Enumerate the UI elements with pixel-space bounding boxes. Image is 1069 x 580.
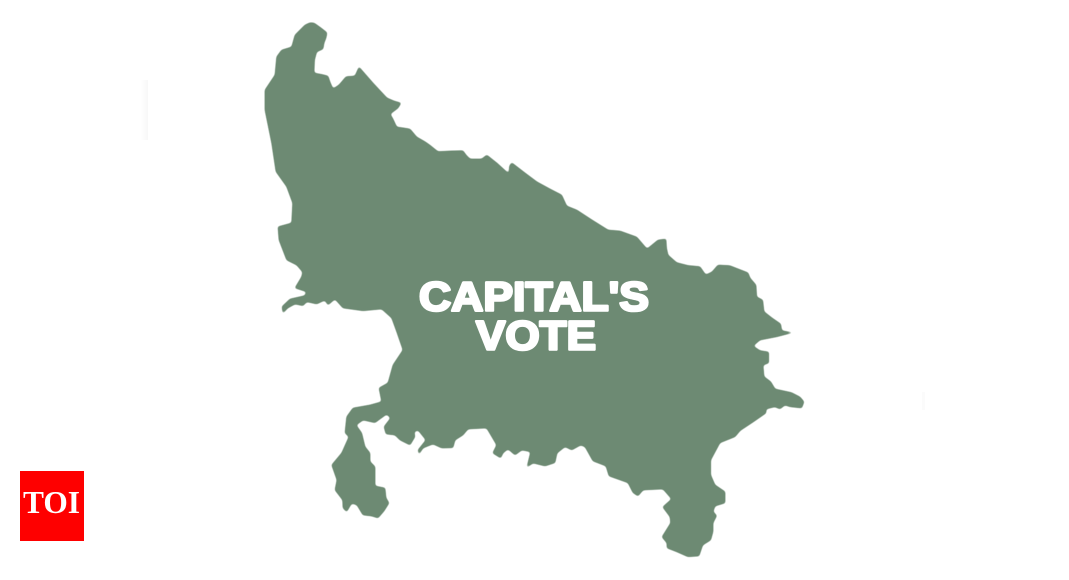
logo: TOI: TOI <box>23 484 80 520</box>
title: Capital's Vote: VOTE <box>476 312 596 358</box>
map of Uttar Pradesh <box>265 23 804 557</box>
title: Capital's Vote: CAPITAL'S <box>419 274 649 320</box>
title: Capital's Vote <box>419 274 649 358</box>
logo: TOI <box>20 471 84 541</box>
